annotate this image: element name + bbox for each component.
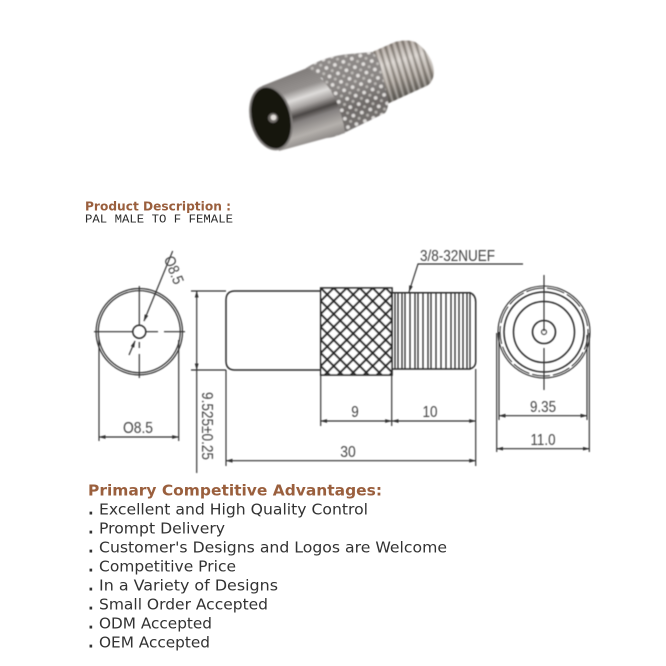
dimension 9: 9	[351, 404, 359, 421]
advantages list	[88, 500, 447, 652]
item: .	[88, 520, 94, 538]
knurled section	[321, 288, 392, 375]
product description heading: Product Description :	[85, 198, 231, 214]
dimension 9.35: 9.35	[530, 399, 556, 416]
item: OEM Accepted	[99, 634, 210, 652]
dimension 11.0: 11.0	[530, 432, 556, 449]
bottom diameter label: O8.5	[123, 420, 153, 437]
item: .	[88, 538, 94, 556]
item: Prompt Delivery	[99, 520, 225, 538]
plug outline circles	[94, 286, 185, 378]
item: .	[88, 558, 94, 576]
product description text: PAL MALE TO F FEMALE	[85, 214, 233, 226]
item: .	[88, 634, 94, 652]
item: Competitive Price	[99, 558, 236, 576]
height dimension label: 9.525±0.25	[198, 392, 215, 460]
left end view with dimensions	[94, 251, 186, 441]
item: .	[88, 614, 94, 632]
technical drawing	[94, 248, 590, 473]
dimension 30: 30	[340, 444, 356, 461]
advantages heading: Primary Competitive Advantages:	[88, 482, 382, 500]
thread section	[392, 293, 476, 369]
item: .	[88, 596, 94, 614]
F connector circles	[498, 275, 590, 390]
item: In a Variety of Designs	[99, 576, 278, 594]
plug body	[262, 68, 345, 151]
item: Customer's Designs and Logos are Welcome	[99, 538, 447, 556]
item: ODM Accepted	[99, 614, 212, 632]
thread callout	[409, 264, 523, 292]
product photo: PAL male to F female connector	[243, 40, 434, 155]
right end view with dimensions	[497, 275, 590, 452]
dimension 10: 10	[422, 404, 438, 421]
height dimension	[191, 291, 226, 473]
item: .	[88, 500, 94, 518]
plug body outline	[226, 291, 321, 370]
knurled sleeve	[306, 52, 388, 138]
length dimensions	[226, 369, 476, 466]
diagonal bore leader	[144, 251, 173, 321]
item: Excellent and High Quality Control	[99, 500, 368, 518]
plug opening with centre pin	[243, 81, 299, 155]
side view: 3/8-32NUEF	[420, 248, 495, 265]
bottom diameter dimension	[99, 340, 179, 441]
side view	[191, 248, 523, 473]
F female threaded end	[370, 40, 434, 104]
item: .	[88, 576, 94, 594]
diagonal label: O8.5	[160, 254, 186, 287]
inner and outer diameter dimensions	[497, 332, 589, 452]
item: Small Order Accepted	[99, 596, 268, 614]
